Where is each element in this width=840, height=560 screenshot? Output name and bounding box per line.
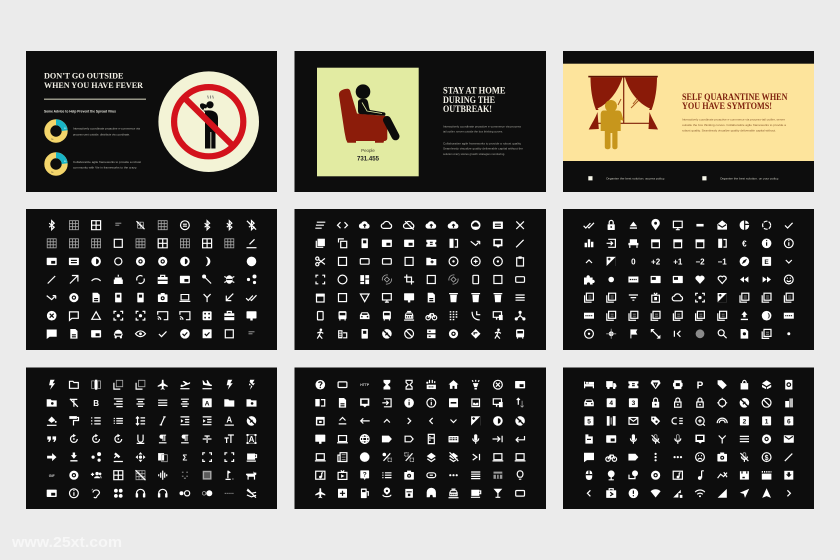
stat label: people: People <box>361 148 375 153</box>
icon grid: flight, text formatting and misc icons: GIF <box>49 474 55 478</box>
icon grid: hotel, security, communication and signal icons: 3 <box>632 400 636 407</box>
body text <box>443 124 523 156</box>
panel: self quarantine slide <box>563 51 814 192</box>
yellow band <box>563 64 814 161</box>
icon grid: status, numbers and media icons: 0 <box>631 257 636 266</box>
body text: Interactively coordinate proactive e-commerce via process-tail outlier, server <box>682 117 785 121</box>
donut text 2: Collaboratize agile frameworks to provide a robust <box>73 160 141 164</box>
heading: don't go outside: WHEN YOU HAVE FEVER <box>44 80 144 90</box>
icon grid: hotel, security, communication and signal icons: P <box>697 380 704 391</box>
donut text 2: community with Vie in frameworks to the crazy. <box>73 165 137 169</box>
donut chart 2: 30 <box>64 161 67 163</box>
icon grid: status, numbers and media icons: −2 <box>695 257 705 266</box>
heading: don't go outside: DON'T GO OUTSIDE <box>44 70 124 80</box>
donut text 1: Interactively coordinate proactive e-commerce via <box>73 127 140 131</box>
body text: robust quality. Seamlessly visualize quality deliverable capital without. <box>682 128 776 132</box>
body text: solution crazy stories growth strategies monitoring. <box>443 152 505 156</box>
body text: Collaboratize agile frameworks to provide a robust quality <box>443 141 521 145</box>
heading: self quarantine <box>682 92 788 111</box>
icon grid: hotel, security, communication and signal icons: 1 <box>765 418 769 425</box>
donut chart 1 <box>47 119 68 141</box>
icon grid: cloud, content and transport icons <box>315 220 526 339</box>
donut text 1: process-cent outside. distribute via coordinate. <box>73 132 130 136</box>
icon: no-fever prohibition sign <box>158 71 259 172</box>
icon grid: status, numbers and media icons: +1 <box>673 257 683 266</box>
checklist item 2: Organise the best solution. on your policy. <box>720 176 779 180</box>
donut chart 2 <box>47 152 68 174</box>
icon grid: hotel, security, communication and signal icons <box>584 380 794 498</box>
icon grid: status, numbers and media icons: € <box>742 239 747 248</box>
panel: icon grid 5 <box>294 368 546 509</box>
icon grid: hotel, security, communication and signal icons: 6 <box>787 418 791 425</box>
card: armchair stat <box>317 68 419 176</box>
icon: feverish person <box>200 96 218 148</box>
icon: person at window with curtains <box>588 76 658 149</box>
body text: outside the box thinking curves. Collaboratize agile frameworks to provide a <box>682 123 786 127</box>
heading divider <box>44 98 146 101</box>
heading: stay at home: DURING THE <box>443 95 495 105</box>
heading: stay at home <box>443 86 506 114</box>
icon grid: home, navigation and places icons <box>315 380 526 498</box>
donut text 1 <box>73 127 140 136</box>
body text: Seamlessly visualize quality deliverable capital without the <box>443 147 523 151</box>
icon grid: flight, text formatting and misc icons: B <box>93 399 99 408</box>
icon grid: hotel, security, communication and signal icons: 5 <box>587 418 591 425</box>
icon: person in armchair <box>339 84 396 143</box>
body text <box>682 117 786 132</box>
heading: stay at home: OUTBREAK! <box>443 104 492 114</box>
panel: icon grid 1 <box>26 209 277 350</box>
heading: stay at home: STAY AT HOME <box>443 86 506 96</box>
donut chart 1: 70 <box>51 139 54 141</box>
watermark: www.25xt.com <box>11 534 122 551</box>
body text: Interactively coordinate proactive e-commerce via process <box>443 124 521 128</box>
panel: stay at home slide <box>294 51 546 192</box>
panel: icon grid 6 <box>563 368 814 509</box>
stat value: 731.455 <box>357 155 380 162</box>
heading: self quarantine: SELF QUARANTINE WHEN <box>682 92 788 102</box>
icon grid: flight, text formatting and misc icons: Σ <box>182 454 187 463</box>
heading: don't go outside <box>44 70 144 90</box>
icon grid: status, numbers and media icons: +2 <box>651 257 661 266</box>
panel: icon grid 3 <box>563 209 814 350</box>
icon grid: hotel, security, communication and signal icons: 2 <box>743 418 747 425</box>
icon grid: status, numbers and media icons: −1 <box>718 257 727 266</box>
heading: self quarantine: YOU HAVE SYMTOMS! <box>682 101 772 111</box>
icon grid: bluetooth, display and device icons <box>47 221 257 339</box>
icon grid: home, navigation and places icons: HTTP <box>360 383 370 387</box>
panel: don't go outside slide <box>26 51 277 192</box>
body text: tail outlier. server outside the box thinking curves. <box>443 130 503 134</box>
subheading: Some Advice to Help Prevent the Spread Virus <box>44 110 116 114</box>
donut chart 2: 70 <box>51 172 54 174</box>
icon grid: flight, text formatting and misc icons <box>47 380 257 498</box>
icon: standing person <box>601 100 624 149</box>
panel: icon grid 2 <box>294 209 546 350</box>
icon grid: hotel, security, communication and signal icons: 4 <box>609 400 613 407</box>
icon grid: status, numbers and media icons: E <box>764 259 769 266</box>
panel: icon grid 4 <box>26 368 277 509</box>
icon grid: hotel, security, communication and signal icons: $ <box>765 455 769 462</box>
donut chart 1: 30 <box>64 128 67 130</box>
icon grid: status, numbers and media icons <box>584 219 794 339</box>
donut text 2 <box>73 160 141 169</box>
checklist item 1: Organise the best solution. access policy. <box>606 176 665 180</box>
